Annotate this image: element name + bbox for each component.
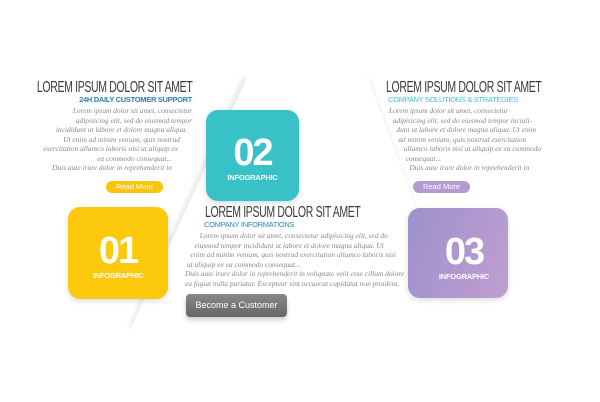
left body text [43,106,192,172]
center body text: ut aliquip ex ea commodo consequat... [187,260,301,268]
center body text [185,231,404,288]
label infographic: INFOGRAPHIC [93,271,143,280]
left body text: Ut enim ad minim veniam, quis nostrud [63,134,180,144]
button: read more purple: Read More [423,182,460,191]
left heading: LOREM IPSUM DOLOR SIT AMET [36,79,192,96]
center body text: Lorem ipsum dolor sit amet, consectetur adipisicing elit, sed do [200,231,388,240]
right body text: adipisicing elit, sed do eiusmod tempor inciali- [393,116,532,124]
left body text: Duis aute irure dolor in reprehenderit in [52,163,172,172]
left body text: Lorem ipsum dolor sit amet, consectetur [73,106,192,115]
left body text: adipisicing elit, sed do eiusmod tempor [76,116,192,124]
center body text: eu fugiat nulla pariatur. Excepteur sint occaecat cupidatat non proident, [185,278,399,288]
left subheading: 24H DAILY CUSTOMER SUPPORT [79,95,192,104]
number 01: 01 [99,230,137,272]
number 03: 03 [445,231,483,273]
button: read more yellow: Read More [116,182,153,191]
left body text: incididunt ut labore et dolore magna aliqua. [56,125,187,134]
center heading: LOREM IPSUM DOLOR SIT AMET [205,204,361,221]
button: read more purple [413,181,470,193]
left body text: ea commodo consequat... [97,154,172,162]
right body text: Duis aute irure dolor in reprehenderit in [409,163,529,172]
right body text: ad minim veniam, quis nostrud exercitation [398,134,526,144]
card 01 yellow [68,207,168,299]
label infographic: INFOGRAPHIC [227,173,278,182]
card 03 purple [408,208,508,298]
right body text: dunt ut labore et dolore magna aliqua. Ut enim [396,125,536,134]
number 02: 02 [233,132,272,174]
right body text [388,106,541,172]
button: become a customer: Become a Customer [195,300,278,310]
label infographic: INFOGRAPHIC [439,272,489,281]
button: become a customer [186,294,287,317]
card 02 teal [206,110,299,201]
left body text: exercitation ullamco laboris nisi ut aliquip ex [43,144,178,153]
center body text: Duis aute irure dolor in reprehenderit in voluptate velit esse cillum dolore [185,269,404,278]
right body text: ullamco laboris nisi ut aliquip ex ea commodo [404,144,541,153]
center body text: eiusmod tempor incididunt ut labore et dolore magna aliqua. Ut [194,240,384,250]
center subheading: COMPANY INFORMATIONS [204,220,294,229]
right subheading: COMPANY SOLUTIONS & STRATEGIES [388,95,518,104]
right body text: consequat... [406,154,441,162]
button: read more yellow [106,181,163,193]
right heading: LOREM IPSUM DOLOR SIT AMET [386,79,542,96]
right body text: Lorem ipsum dolor sit amet, consectetur [389,106,508,115]
center body text: enim ad minim veniam, quis nostrud exercitation ullamco laboris nisi [191,250,396,259]
